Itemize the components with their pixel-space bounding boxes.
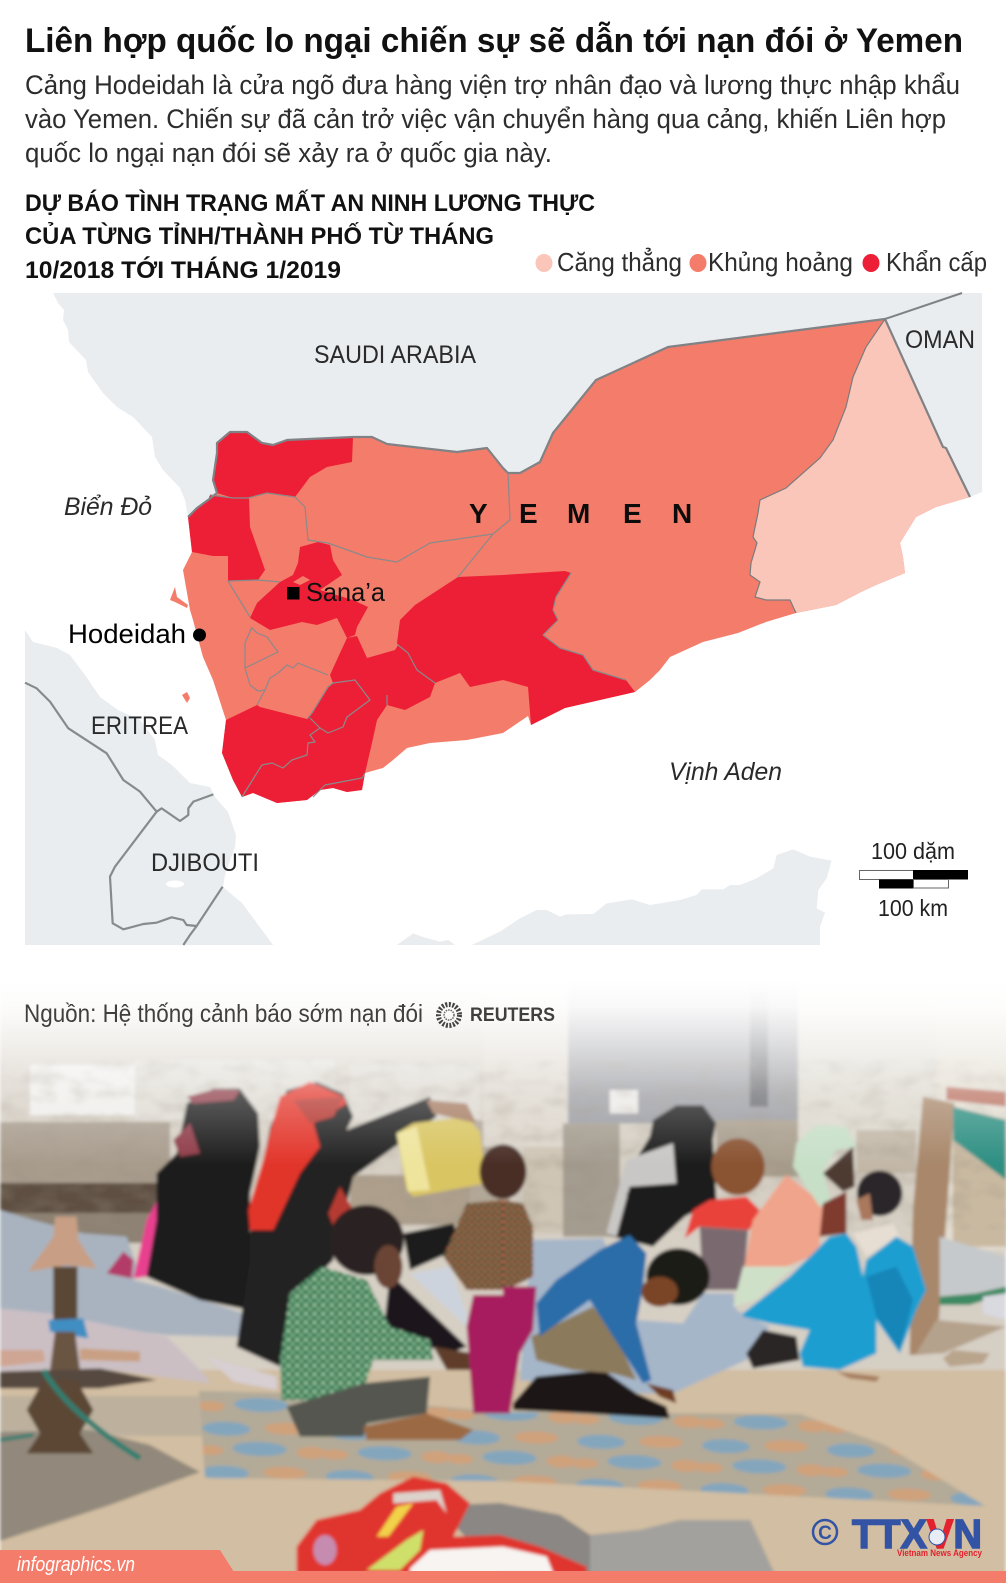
photo: standing child right side <box>480 1144 526 1199</box>
logo: TTXVN: C <box>818 1523 832 1544</box>
photo: child in green sweater <box>280 1267 433 1400</box>
legend: Khẩn cấp <box>886 247 987 277</box>
oman border top <box>885 293 962 319</box>
scale bar: 100 km <box>878 895 948 921</box>
label: Gulf of Aden: Vịnh Aden <box>669 758 782 786</box>
photo: wall texture <box>0 1060 1006 1230</box>
photo: pink garment <box>132 1200 160 1280</box>
label: Oman: OMAN <box>905 326 975 354</box>
photo: yellow jerry can <box>397 1117 487 1197</box>
photo: displaced family in Yemen <box>0 980 1006 1580</box>
photo: ground shadow <box>0 1430 200 1541</box>
photo wall and ground backdrop <box>0 980 1006 1580</box>
scale bar: 100 dặm <box>871 838 955 864</box>
Yemen: crisis level base <box>183 319 970 803</box>
label: Saudi Arabia: SAUDI ARABIA <box>314 341 476 369</box>
Yemen: small islands <box>170 576 310 703</box>
photo: grey blanket at bottom <box>456 1502 592 1571</box>
intro text block: Cảng Hodeidah là cửa ngõ đưa hàng viện trợ nhân đạo và lương thực nhập khẩu <box>25 70 960 100</box>
label: Eritrea: ERITREA <box>91 712 188 740</box>
photo: child with red shirt and backpack <box>711 1138 765 1195</box>
photo: sheet under boy <box>520 1238 770 1393</box>
photo top fade to white <box>0 980 1006 1165</box>
map subtitle: 10/2018 TỚI THÁNG 1/2019 <box>25 256 341 284</box>
label: Djibouti: DJIBOUTI <box>151 849 259 877</box>
photo: baby with knit hat <box>857 1171 902 1216</box>
footer band <box>0 1550 1006 1583</box>
photo: woman with mint scarf <box>743 1175 823 1273</box>
map <box>25 293 982 945</box>
legend: Khủng hoảng <box>708 247 853 277</box>
logo: TTXVN: TTXVN <box>852 1511 982 1557</box>
photo: teal canopy <box>953 1107 1006 1180</box>
photo: seated woman in black <box>147 1088 260 1310</box>
scale bar <box>860 838 968 921</box>
land: Eritrea and Djibouti <box>25 630 273 945</box>
photo: woman in black veil <box>606 1105 716 1247</box>
label: Yemen: YEMEN <box>469 498 692 529</box>
marker: Hodeidah <box>193 628 206 642</box>
label: Sana'a: Sana’a <box>306 577 386 607</box>
Yemen: stressed region boundary <box>750 319 885 613</box>
land: Saudi Arabia and Oman <box>53 293 982 600</box>
photo: mattress at right <box>940 1237 1006 1297</box>
photo: rug <box>199 1391 985 1506</box>
land: Somalia coast <box>397 849 832 945</box>
photo: hookah <box>0 1217 140 1458</box>
photo: right half figures <box>480 1087 1006 1418</box>
legend: Căng thẳng <box>557 246 682 277</box>
intro text block: vào Yemen. Chiến sự đã cản trở việc vận chuyển hàng qua cảng, khiến Liên hợp <box>25 104 946 134</box>
Yemen: north border <box>188 319 970 517</box>
map subtitle: DỰ BÁO TÌNH TRẠNG MẤT AN NINH LƯƠNG THỰC <box>25 189 595 217</box>
intro text block: quốc lo ngại nạn đói sẽ xảy ra ở quốc gia này. <box>25 138 552 168</box>
photo: blue dress <box>743 1233 926 1370</box>
marker: Sana'a <box>287 587 300 600</box>
Yemen: governorate boundaries <box>210 473 626 797</box>
photo: red bag at bottom <box>297 1477 587 1573</box>
footer site name: infographics.vn <box>17 1554 135 1576</box>
logo: TTXVN: Vietnam News Agency <box>897 1548 982 1558</box>
icon: Reuters logo: REUTERS <box>470 1005 555 1026</box>
Yemen: stressed region east <box>750 319 970 613</box>
photo: woman pouring water <box>237 1082 437 1367</box>
land: gulf notch <box>166 880 184 888</box>
photo: boy in blue jacket <box>513 1370 670 1418</box>
label: Red Sea: Biển Đỏ <box>64 493 152 521</box>
title: Liên hợp quốc lo ngại chiến sự sẽ dẫn tới nạn đói ở Yemen <box>25 22 963 60</box>
map subtitle <box>25 189 595 284</box>
photo: mattress <box>0 1308 210 1383</box>
photo: ground shading left <box>0 1396 205 1436</box>
label: Hodeidah: Hodeidah <box>68 619 186 649</box>
source line: Nguồn: Hệ thống cảnh báo sớm nạn đói <box>24 1000 423 1028</box>
photo: wooden post <box>910 1097 955 1355</box>
photo: blanket <box>0 1210 243 1337</box>
legend <box>536 246 987 277</box>
african borders <box>25 683 223 945</box>
icon: Reuters logo <box>438 1004 555 1026</box>
photo: dark fabric by child <box>383 1273 467 1353</box>
photo: left half figures <box>0 1082 520 1458</box>
Yemen: emergency regions <box>188 432 635 803</box>
photo: standing child left side <box>443 1200 503 1290</box>
intro text block <box>25 70 960 168</box>
map subtitle: CỦA TỪNG TỈNH/THÀNH PHỐ TỪ THÁNG <box>25 221 494 250</box>
photo: right half wall and curtains <box>481 1008 1006 1250</box>
